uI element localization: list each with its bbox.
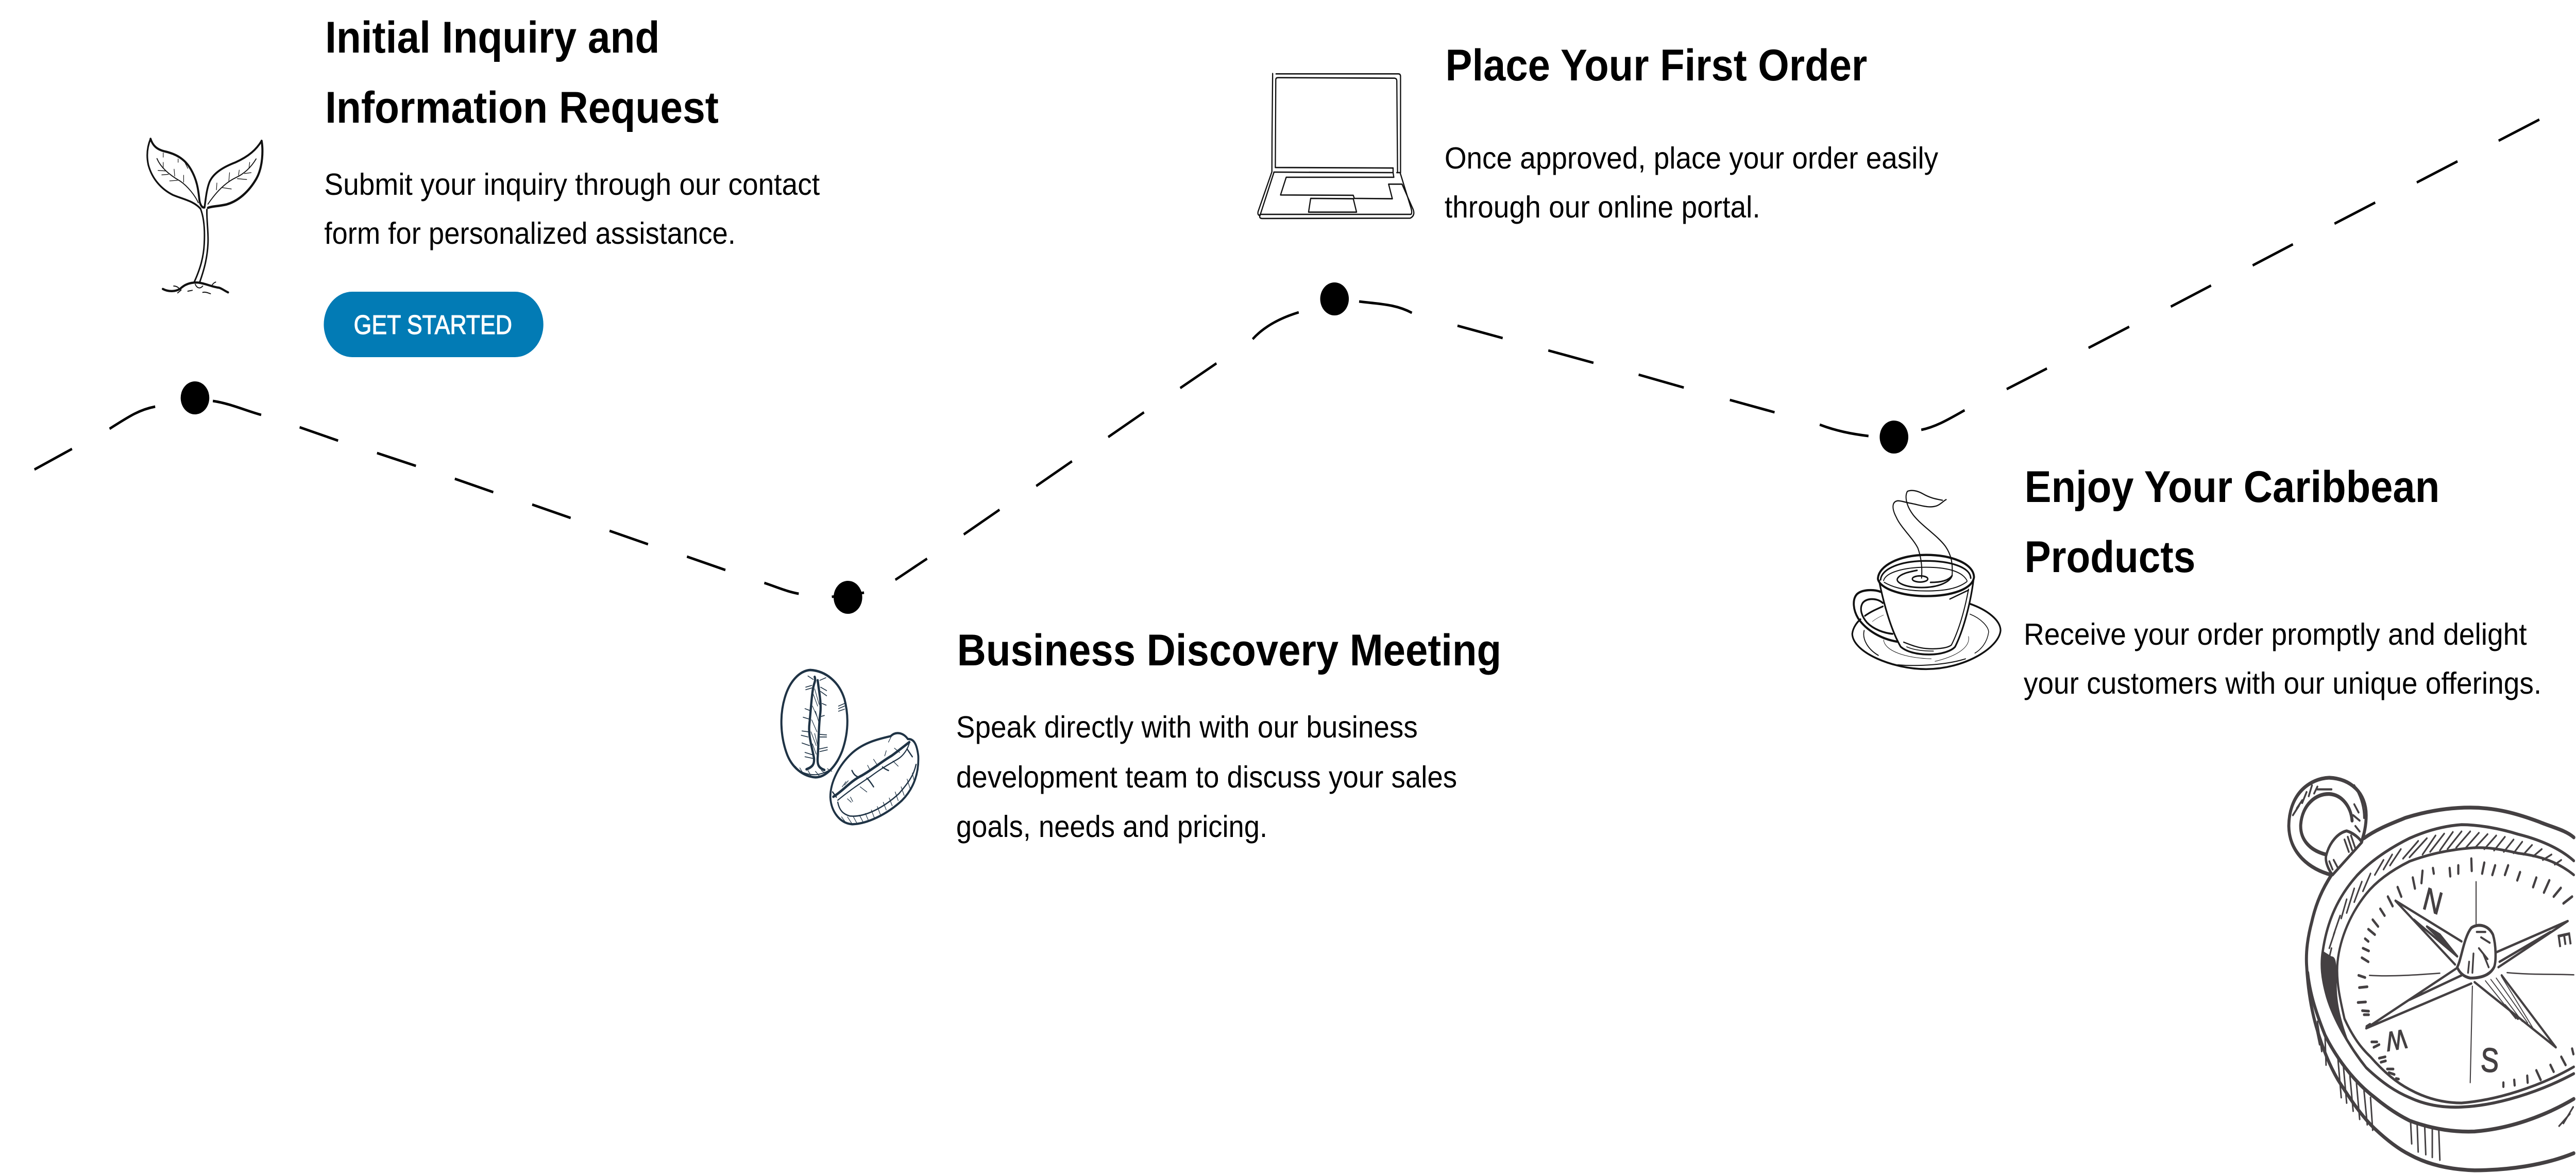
step marker dot 1	[181, 381, 209, 414]
description: development team to discuss your sales	[956, 760, 1457, 794]
compass body outlines	[2307, 808, 2574, 1170]
heading: Business Discovery Meeting	[957, 626, 1501, 675]
step marker dot 3	[1320, 282, 1349, 315]
compass south letter: S	[2480, 1041, 2500, 1080]
button: get started	[324, 292, 544, 357]
description: Submit your inquiry through our contact	[324, 167, 820, 202]
panel: step 4 enjoy products	[1852, 462, 2541, 700]
dashed journey path	[35, 120, 2539, 597]
description: through our online portal.	[1445, 190, 1760, 224]
icon: compass illustration	[2289, 778, 2575, 1170]
button: get started: GET STARTED	[354, 310, 512, 340]
heading: Information Request	[325, 83, 719, 132]
bezel hatching	[2312, 831, 2573, 1160]
step marker dot 4	[1879, 421, 1908, 454]
compass north letter: N	[2420, 880, 2446, 921]
icon: laptop	[1258, 74, 1414, 219]
description: goals, needs and pricing.	[956, 810, 1267, 844]
heading: Place Your First Order	[1446, 41, 1867, 90]
compass west letter: W	[2385, 1023, 2408, 1057]
heading: Products	[2025, 532, 2195, 582]
description: form for personalized assistance.	[324, 216, 736, 250]
description: Once approved, place your order easily	[1445, 141, 1939, 175]
panel: step 1 initial inquiry	[147, 13, 820, 357]
compass east letter: E	[2554, 930, 2575, 949]
compass star	[2366, 882, 2574, 1083]
panel: step 2 business discovery	[782, 626, 1501, 844]
step marker dot 2	[834, 581, 862, 614]
compass ring	[2289, 778, 2366, 875]
compass tick marks	[2358, 859, 2573, 1086]
icon: coffee beans	[782, 670, 919, 824]
icon: sprout	[147, 139, 262, 294]
description: Receive your order promptly and delight	[2024, 617, 2527, 651]
panel: step 3 place order	[1258, 41, 1939, 224]
description: your customers with our unique offerings.	[2024, 666, 2541, 700]
heading: Initial Inquiry and	[325, 13, 659, 62]
description: Speak directly with with our business	[956, 710, 1418, 744]
heading: Enjoy Your Caribbean	[2025, 462, 2439, 512]
icon: coffee cup	[1852, 491, 2001, 669]
